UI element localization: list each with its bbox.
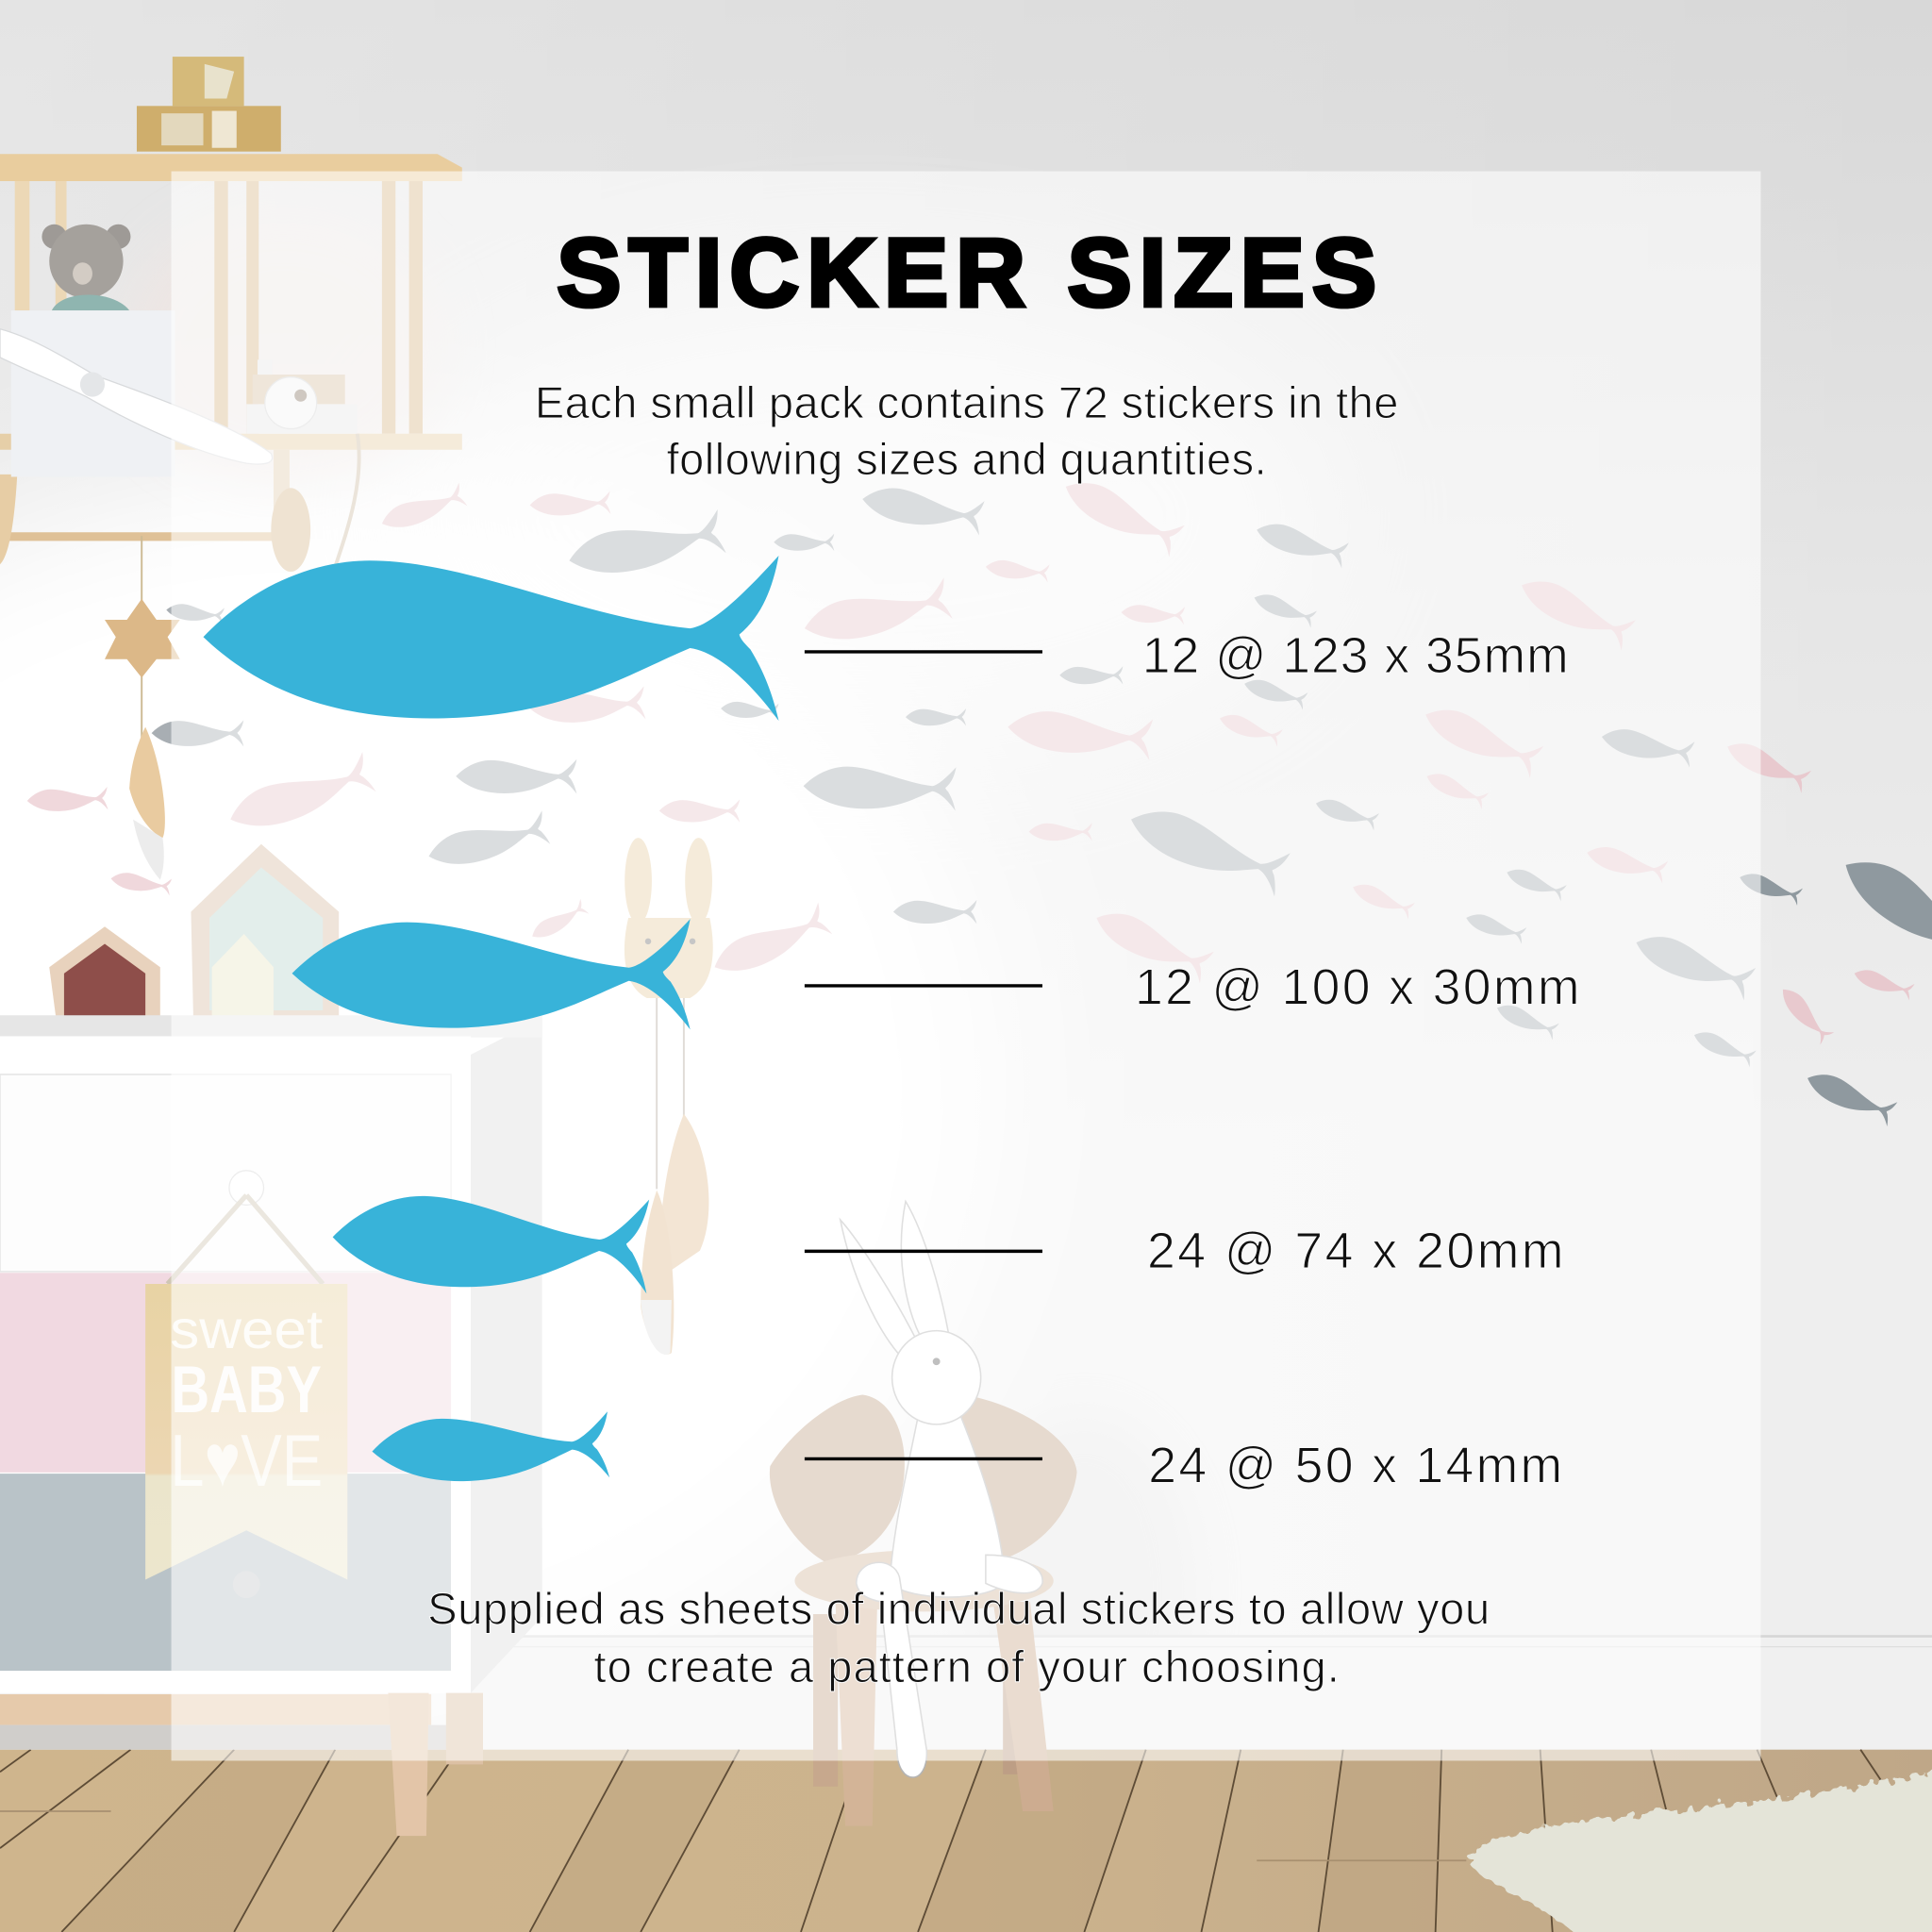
bunny wall hook xyxy=(625,838,713,1189)
size row 4: smallest fish: 24 @ 50 x 14mm xyxy=(1148,1438,1562,1493)
icon: blue fish 50mm xyxy=(371,1411,609,1485)
white rabbit figurine xyxy=(841,1201,1042,1777)
translucent white panel xyxy=(172,172,1760,1760)
pink fish decals xyxy=(26,471,1914,1045)
icon: blue fish 74mm xyxy=(331,1191,649,1293)
size row 4: smallest fish xyxy=(371,1411,1562,1493)
mouse-ear chair xyxy=(770,1395,1077,1826)
icon: blue fish 123mm xyxy=(204,556,778,721)
size row 2: second fish xyxy=(292,919,1579,1029)
size row 3: third fish xyxy=(331,1191,1563,1293)
footer note xyxy=(427,1583,1490,1691)
toy camera xyxy=(246,359,359,567)
chest of drawers xyxy=(0,1015,542,1836)
wooden houses xyxy=(49,844,339,1033)
hanging sign xyxy=(145,1171,347,1579)
icon: blue fish 100mm xyxy=(292,919,691,1029)
size row 1: largest fish xyxy=(204,556,1569,721)
size row 3: third fish: 24 @ 74 x 20mm xyxy=(1147,1224,1563,1279)
wall feathers xyxy=(641,1114,708,1355)
sign lettering: L♥VE xyxy=(170,1419,323,1502)
footer note: Supplied as sheets of individual stickers to allow you xyxy=(427,1583,1490,1633)
sign lettering xyxy=(170,1300,323,1502)
sign lettering: sweet xyxy=(170,1300,323,1360)
title: STICKER SIZES xyxy=(557,219,1376,326)
sign lettering: BABY xyxy=(172,1352,322,1426)
wall fish decals xyxy=(152,482,1932,1126)
toy blocks xyxy=(137,57,281,152)
intro text: following sizes and quantities. xyxy=(667,434,1267,484)
skirting board xyxy=(471,1635,1932,1750)
teddy bear xyxy=(42,225,130,310)
size row 1: largest fish: 12 @ 123 x 35mm xyxy=(1142,628,1569,684)
intro text: Each small pack contains 72 stickers in the xyxy=(535,377,1398,427)
airplane shelf xyxy=(0,154,462,572)
size row 2: second fish: 12 @ 100 x 30mm xyxy=(1135,959,1579,1015)
wooden floor xyxy=(0,1750,1932,1932)
fluffy rug xyxy=(1466,1770,1932,1932)
footer note: to create a pattern of your choosing. xyxy=(594,1641,1340,1691)
white plane box and propeller xyxy=(0,310,273,476)
intro text xyxy=(535,377,1398,484)
hanging star and feather mobile xyxy=(105,536,180,880)
